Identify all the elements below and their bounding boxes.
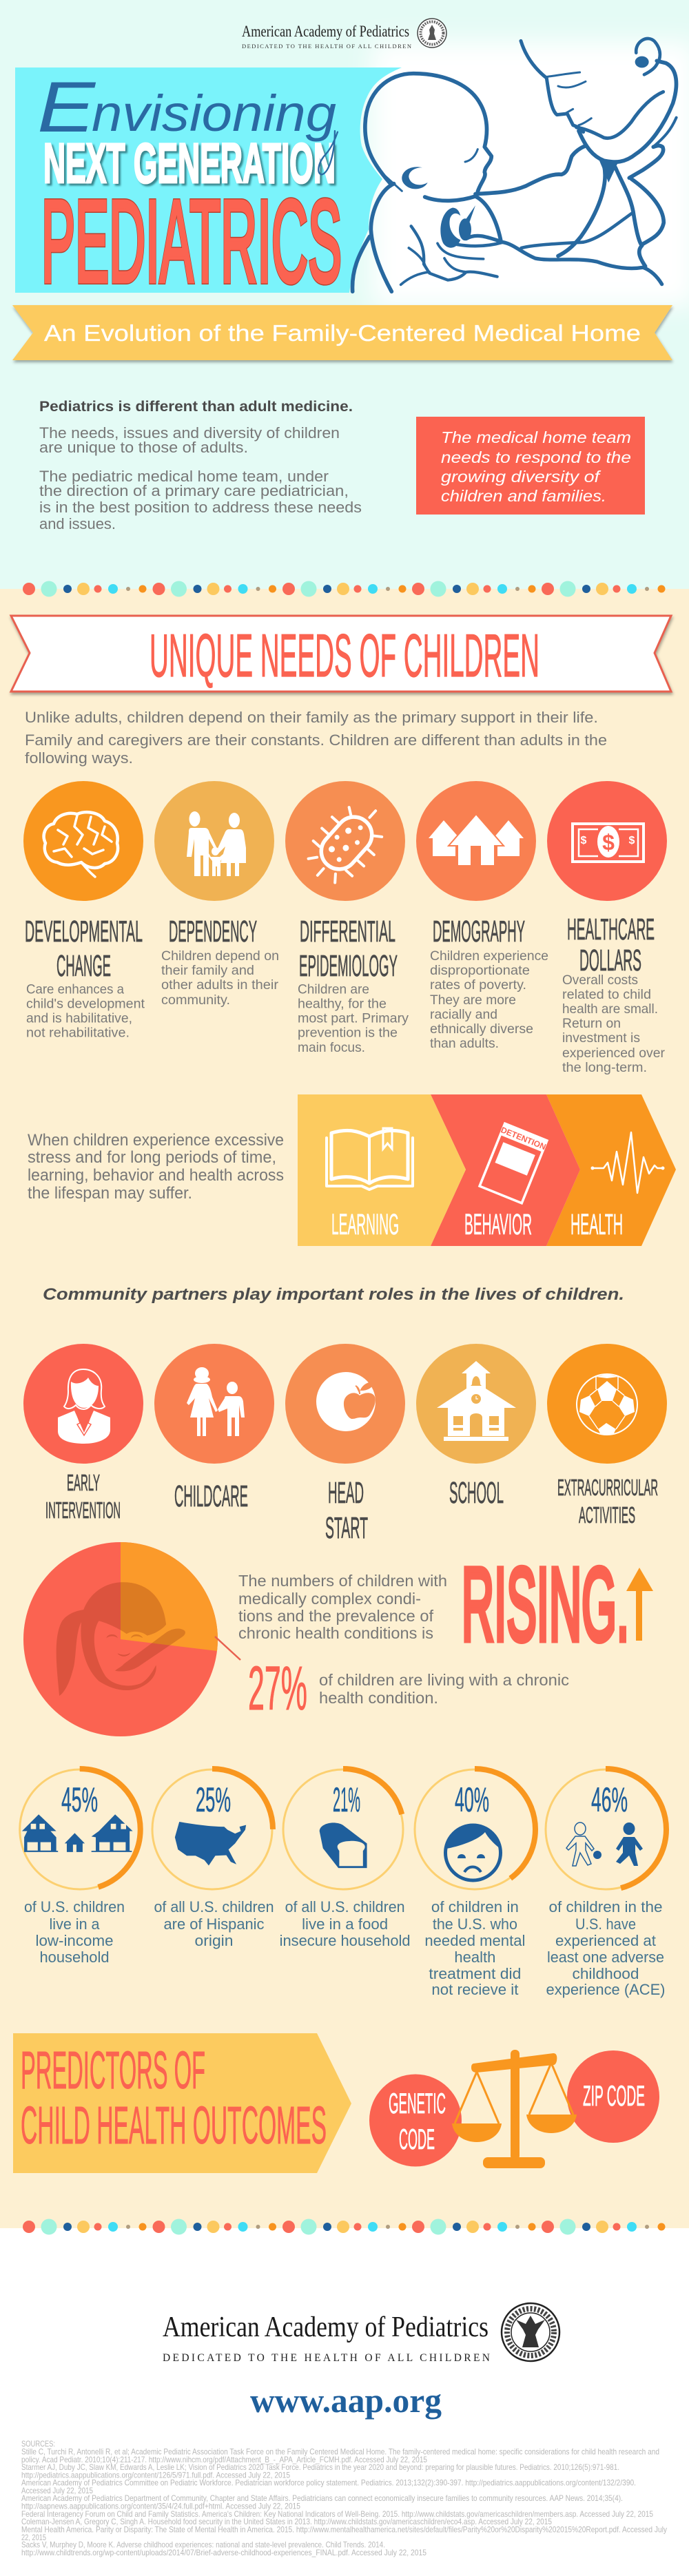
panel: school: SCHOOL [449,1476,504,1510]
panel: healthcare dollars [547,781,667,946]
stat: 27 percent: of children are living with a chronic [319,1671,569,1689]
chevron: learning [298,1094,466,1246]
body text: disproportionate [430,963,530,978]
text block: unique needs intro [25,709,607,767]
body text: experienced over [562,1046,666,1061]
stat: 27 percent: 27% [248,1654,307,1723]
text block: pediatrics intro: the direction of a primary care pediatrician, [39,482,349,499]
stat: 21 percent food insecure: 21% [333,1780,360,1819]
caption: of children in [431,1898,519,1915]
stat: 46 percent adverse experience: 46% [591,1780,628,1819]
top logo [242,19,446,50]
caption: origin [194,1932,233,1949]
sources: Accessed July 22, 2015 [21,2486,93,2495]
panel: head start: HEAD [328,1476,364,1510]
title: Envisioning: E [37,67,96,147]
caption: of U.S. children [24,1898,125,1915]
body text: and is habilitative, [26,1011,132,1026]
caption: low-income [36,1932,113,1949]
caption [280,1898,411,1949]
footer url: www.aap.org [250,2381,442,2420]
caption: are of Hispanic [164,1915,265,1933]
body text: health are small. [562,1001,658,1017]
text block: stress [28,1131,284,1203]
stat: 27 percent: health condition. [319,1689,438,1707]
icon: balance scale [452,2050,577,2168]
caption: of children in the [548,1898,663,1915]
caption: U.S. have [575,1915,636,1933]
text: EPIDEMIOLOGY [299,949,398,983]
body text: their family and [161,963,254,978]
icon: houses [22,1814,133,1852]
stat: 25 percent hispanic: 25% [196,1780,231,1819]
text block: medically complex: medically complex condi- [238,1590,421,1608]
caption: of all U.S. children [154,1898,274,1915]
sources: Sacks V, Murphey D, Moore K. Adverse childhood experiences: national and state-level prevalence. Child Trends. 2014. [21,2540,385,2550]
callout: medical home team: children and families. [441,487,606,505]
chevron: health [546,1094,676,1246]
stat: 45 percent low-income [19,1769,141,1966]
circle: genetic code: CODE [399,2123,435,2155]
icon: bacterium [296,792,397,894]
icon: detention slip [478,1123,548,1203]
panel: extracurricular activities [547,1344,667,1500]
text: DEVELOPMENTAL [25,915,143,948]
stat: 25 percent hispanic [152,1769,274,1949]
icon: money: $ [602,830,615,855]
stat: 40 percent mental health [414,1769,535,1998]
body text: related to child [562,987,651,1002]
text block: stress: stress and for long periods of time, [28,1148,276,1167]
icon: children playing [566,1822,643,1866]
caption: of all U.S. children [285,1898,405,1915]
text block: pediatrics intro: and issues. [39,515,116,532]
body text: Children depend on [161,948,279,964]
hero illustration white backdrop [372,41,689,307]
body text: racially and [430,1007,497,1022]
text block: medically complex: tions and the prevalence of [238,1607,434,1625]
text block: pediatrics intro: are unique to those of adults. [39,439,248,456]
panel: childcare: CHILDCARE [174,1479,248,1513]
panel: school [416,1344,536,1510]
heading: community partners: Community partners play important roles in the lives of children. [43,1285,624,1304]
icon: soccer ball [577,1374,637,1435]
icon: brain [44,812,118,877]
sources: http://www.childtrends.org/wp-content/uploads/2014/07/Brief-adverse-childhood-experiences_FINAL.pdf. Accessed July 22, 2015 [21,2548,426,2557]
icon: usa map [175,1822,246,1866]
heading ribbon: unique needs of children [11,616,671,692]
caption: least one adverse [547,1949,664,1966]
icon: sick girl [56,1582,185,1696]
top logo: DEDICATED TO THE HEALTH OF ALL CHILDREN [242,43,411,50]
icon: money: $ [581,835,587,846]
title script g tail [318,131,338,174]
banner: predictors of child health outcomes: PREDICTORS OF [21,2041,205,2100]
text: CHANGE [56,949,111,983]
icon: family [185,811,246,876]
text block: pediatrics intro [39,398,362,532]
caption: insecure household [280,1932,411,1949]
title: Envisioning [37,67,336,147]
callout: medical home team: The medical home team [441,428,631,446]
footer logo [163,2303,559,2364]
text block: stress: learning, behavior and health across [28,1166,284,1185]
icon: houses [429,814,524,866]
panel: head start [285,1344,405,1510]
chevron chart: learning behavior health [298,1094,676,1246]
text block: stress: the lifespan may suffer. [28,1184,192,1203]
icon: rising arrow [626,1568,653,1641]
body text [298,982,409,1055]
text: DIFFERENTIAL [300,915,395,948]
body text [430,948,548,1051]
baby [352,74,501,291]
panel: developmental change [23,781,143,948]
caption [154,1898,274,1949]
text block: pediatrics intro: The needs, issues and diversity of children [39,424,340,442]
icon: heartbeat [594,1132,661,1193]
sources: 22, 2015 [21,2533,46,2542]
pie chart: 27 percent with girl [23,1542,240,1736]
text block: pediatrics intro: The pediatric medical home team, under [39,468,329,485]
sources [21,2439,667,2557]
text: START [325,1511,368,1545]
body text: child's development [26,996,145,1011]
banner: subtitle ribbon [12,305,672,360]
text: DEMOGRAPHY [433,915,525,948]
text block: unique needs intro: Family and caregivers are their constants. Children are different than adults in the [25,731,607,749]
body text: investment is [562,1030,640,1046]
icon: money: $ [629,835,635,846]
caption: experience (ACE) [546,1981,666,1998]
body text: rates of poverty. [430,977,526,993]
circle: genetic code [369,2075,462,2167]
caption [546,1898,666,1998]
text block: medically complex [238,1572,447,1642]
panel: dependency [154,781,274,948]
nurse [475,39,677,267]
caption: live in a [50,1915,100,1933]
body text: than adults. [430,1036,499,1051]
stat: 45 percent low-income: 45% [61,1780,98,1819]
caption: the U.S. who [433,1915,517,1933]
caption: experienced at [555,1932,656,1949]
icon: money [573,824,644,862]
stat: 21 percent food insecure [280,1769,411,1949]
footer logo: DEDICATED TO THE HEALTH OF ALL CHILDREN [163,2352,490,2364]
callout: medical home team [416,417,645,515]
icon: apple [316,1372,376,1431]
sources: http://aapnews.aappublications.org/content/35/4/24.full.pdf+html. Accessed July 22, 2015 [21,2502,300,2511]
chevron: behavior [431,1094,580,1246]
chevron: health: HEALTH [570,1208,623,1241]
body text: main focus. [298,1040,365,1055]
sources: http://pediatrics.aappublications.org/content/126/5/971.full.pdf. Accessed July 22, 2015 [21,2471,290,2480]
text block: medically complex: chronic health conditions is [238,1624,433,1642]
icon: detention slip: DETENTION [500,1125,547,1152]
chevron: learning: LEARNING [331,1208,399,1241]
footer logo: American Academy of Pediatrics [163,2312,489,2343]
body text: not rehabilitative. [26,1025,130,1040]
panel: childcare [154,1344,274,1513]
caption: live in a food [302,1915,388,1933]
body text [161,948,279,1008]
callout: medical home team: needs to respond to the [441,448,631,466]
title: Pediatrics [41,176,342,307]
caption: health [454,1949,495,1966]
icon: bread [320,1822,367,1868]
caption [424,1898,525,1998]
sources: SOURCES: [21,2439,55,2449]
stat: 46 percent adverse experience [545,1769,666,1998]
text block: pediatrics intro: is in the best position to address these needs [39,499,362,516]
caption: treatment did [429,1965,521,1982]
body text: Return on [562,1016,621,1031]
title: Envisioning: nvisioning [92,85,336,142]
caption: childhood [572,1965,639,1982]
stat: 40 percent mental health: 40% [455,1780,489,1819]
text block: medically complex: The numbers of children with [238,1572,447,1590]
top logo: American Academy of Pediatrics [242,23,409,40]
panel: early intervention [23,1344,143,1495]
body text: Care enhances a [26,982,124,997]
body text: Children are [298,982,369,997]
body text: most part. Primary [298,1011,409,1026]
body text: prevention is the [298,1025,398,1040]
body text [562,973,666,1075]
title: Next Generation: NEXT GENERATION [43,132,336,195]
panel: demography [416,781,536,948]
icon: woman [58,1369,110,1444]
text block: unique needs intro: Unlike adults, children depend on their family as the primary support in their life. [25,709,598,726]
callout line [215,1637,240,1660]
body text: healthy, for the [298,996,387,1011]
chevron: behavior: BEHAVIOR [464,1208,532,1241]
body text: community. [161,993,230,1008]
banner: subtitle ribbon: An Evolution of the Family-Centered Medical Home [44,320,641,346]
icon: sad face [445,1824,500,1880]
panel: differential epidemiology [285,781,405,948]
text block: pediatrics intro: Pediatrics is different than adult medicine. [39,398,353,415]
circle: zip code [567,2050,659,2143]
body text: ethnically diverse [430,1021,533,1037]
panel: early intervention: EARLY [67,1470,100,1495]
caption: household [40,1949,109,1966]
text block: unique needs intro: following ways. [25,749,133,767]
body text: They are more [430,993,516,1008]
caption [24,1898,125,1966]
hero blue panel [15,67,402,293]
body text: Children experience [430,948,548,964]
sources: policy. Acad Pediatr. 2010;10(4):211-217. http://www.nihcm.org/pdf/Attachment_B_-_APA_Article_FCMH.pdf. Accessed July 22, 2015 [21,2455,427,2464]
body text: other adults in their [161,977,279,993]
circle: genetic code: GENETIC [389,2087,446,2119]
stat: 27 percent [248,1654,569,1723]
illustration: nurse and baby [352,39,677,291]
banner: predictors of child health outcomes [13,2033,351,2173]
caption: not recieve it [431,1981,518,1998]
text: INTERVENTION [45,1497,121,1523]
sources: Coleman-Jensen A, Gregory C, Singh A. Household food security in the United States in 2013. http://www.childstats.gov/americaschildren/eco4.asp. Accessed July 22, 2015 [21,2517,552,2526]
body text: Overall costs [562,973,638,988]
body text [26,982,145,1040]
icon: mother and child [187,1367,245,1436]
caption: needed mental [424,1932,525,1949]
callout: medical home team: growing diversity of [441,468,601,486]
icon: book [327,1128,413,1190]
icon: school house [437,1361,516,1441]
text block: stress: When children experience excessive [28,1131,284,1150]
panel: dependency: DEPENDENCY [169,915,257,948]
body text: the long-term. [562,1060,647,1075]
stethoscope chest piece [440,205,662,284]
